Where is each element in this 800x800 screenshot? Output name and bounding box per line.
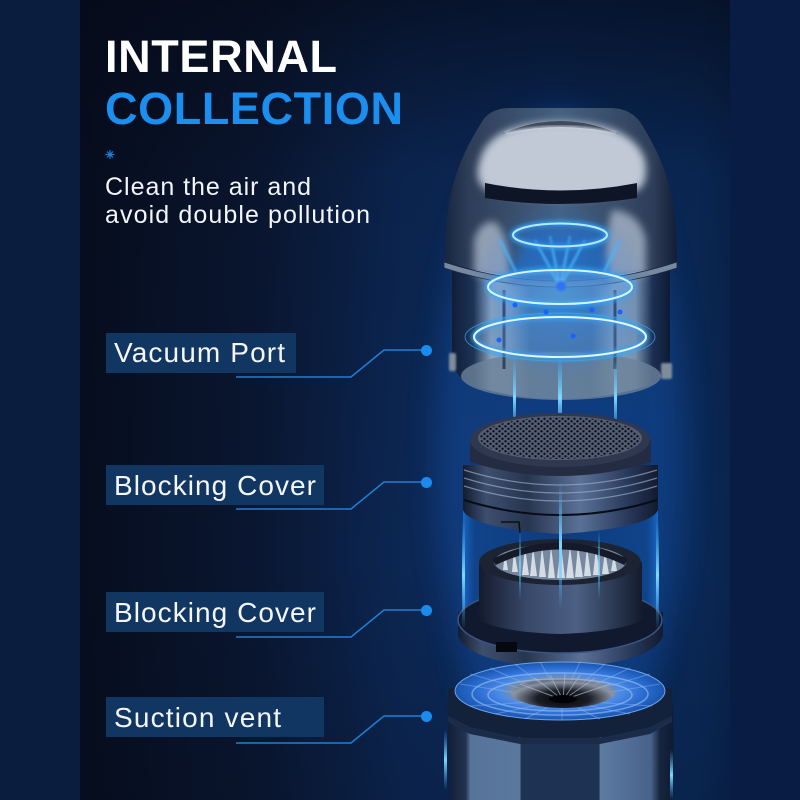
mounting ring	[458, 612, 663, 669]
motor base with suction vent	[444, 662, 674, 800]
label: Blocking Cover upper	[106, 465, 432, 509]
cap top	[470, 440, 651, 476]
heading: COLLECTION	[105, 83, 403, 134]
ring 2	[488, 270, 632, 304]
pale side reflections	[474, 222, 510, 280]
label: Suction vent: Suction vent	[114, 702, 281, 733]
disc radial lines	[460, 662, 660, 720]
heading: INTERNAL	[105, 31, 337, 82]
air flow beams	[513, 355, 617, 440]
threaded cap	[463, 465, 658, 534]
USB port	[496, 642, 517, 652]
subtitle: Clean the air and	[105, 173, 311, 201]
subtitle: avoid double pollution	[105, 201, 370, 229]
label: Suction vent	[106, 697, 432, 743]
filter housing	[463, 413, 658, 640]
mesh grille	[480, 417, 640, 459]
cup floor	[461, 352, 661, 400]
lower transparent body	[452, 262, 670, 399]
base body	[448, 700, 674, 800]
blue energy rings	[465, 200, 655, 380]
ring 3	[465, 313, 655, 361]
label: Vacuum Port	[106, 333, 432, 377]
dark inner ledge	[485, 183, 637, 204]
glass tube	[463, 510, 658, 640]
dome shell	[445, 108, 677, 279]
vent funnel	[509, 672, 617, 708]
disc	[455, 662, 665, 720]
heading	[105, 31, 403, 134]
label: Blocking Cover lower	[106, 592, 432, 637]
glowing streaks	[462, 480, 659, 630]
inner rods	[504, 290, 615, 369]
device back glow	[435, 110, 685, 790]
dust cup dome	[444, 108, 677, 400]
label: Blocking Cover lower: Blocking Cover	[114, 597, 316, 628]
filter spikes	[503, 545, 617, 578]
wire detail	[501, 522, 520, 533]
ring 1	[513, 224, 607, 246]
icon: small asterisk	[106, 150, 114, 159]
waist rim	[444, 262, 677, 287]
spike filter cup	[458, 539, 663, 669]
label: Vacuum Port: Vacuum Port	[114, 337, 285, 368]
subtitle	[105, 173, 370, 229]
side clips	[449, 353, 456, 371]
label: Blocking Cover upper: Blocking Cover	[114, 470, 316, 501]
particles	[496, 302, 622, 342]
base glow	[444, 730, 447, 790]
cup body	[479, 562, 642, 634]
top white highlight	[478, 122, 646, 198]
